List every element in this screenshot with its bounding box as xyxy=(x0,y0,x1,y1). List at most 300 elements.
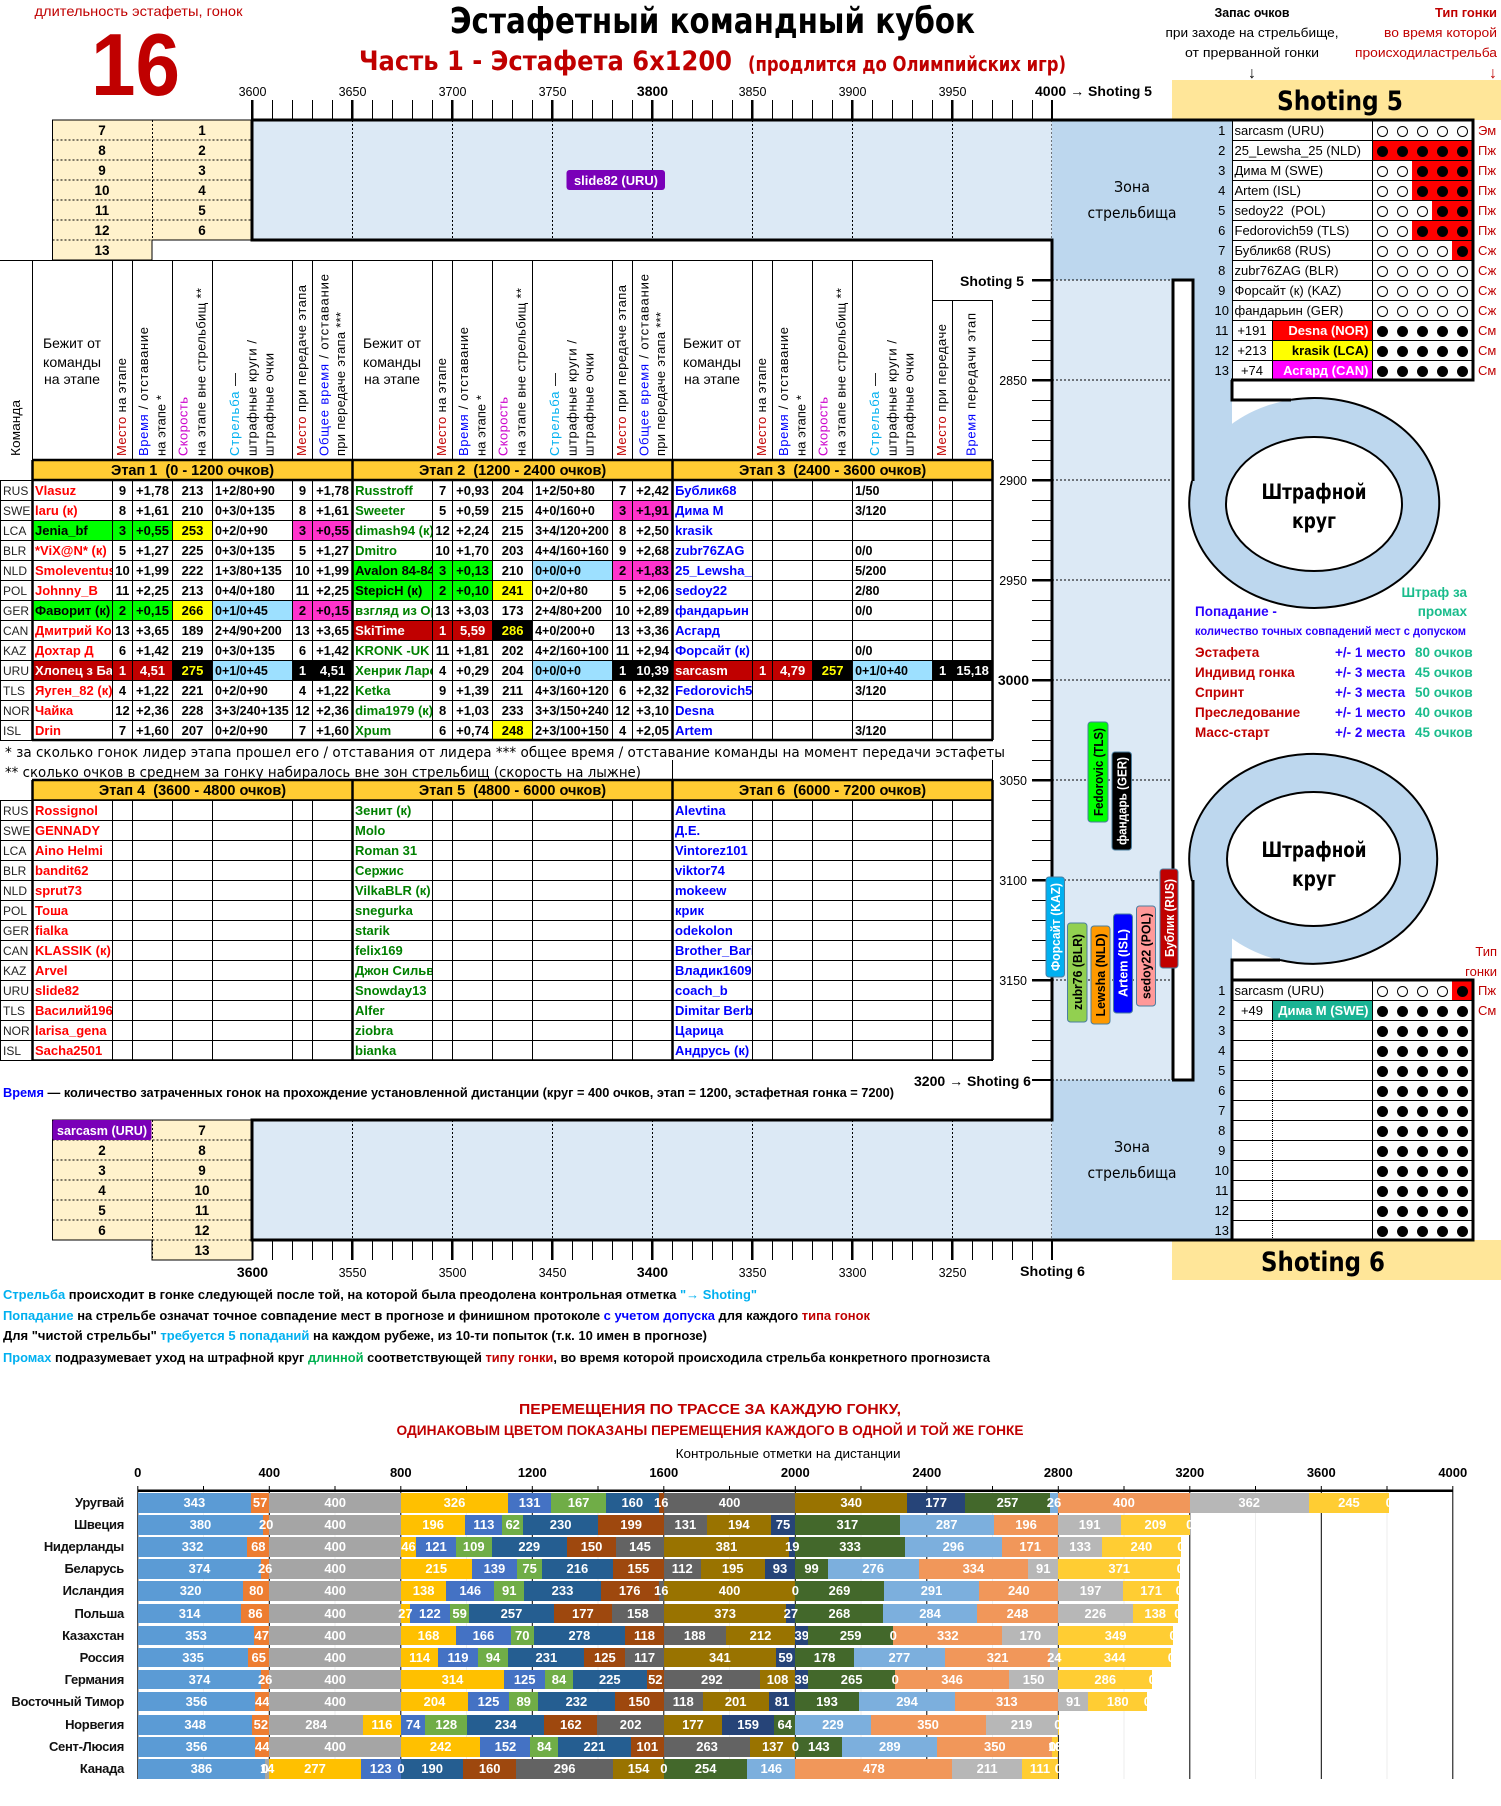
chart row: Канада: 296 xyxy=(554,1761,575,1776)
table header columns: Стрельба — xyxy=(547,373,562,456)
chart row: Германия xyxy=(65,1670,1156,1689)
chart row: Нидерланды: 145 xyxy=(629,1539,651,1554)
table: stages 1-3: 1 xyxy=(439,622,446,638)
table: stages 1-3: 1 xyxy=(299,662,306,678)
table: stages 1-3: +3,03 xyxy=(456,602,489,618)
chart row: Исландия: 176 xyxy=(619,1583,641,1598)
table: stages 4-6: Этап 5 (4800 - 6000 очков) xyxy=(419,782,606,798)
table header columns: на этапе xyxy=(364,371,420,387)
table: Shoting 5 standings: Пж xyxy=(1478,223,1496,238)
table: stages 1-3: Avalon 84-84 xyxy=(355,562,433,578)
chart row: Канада: 146 xyxy=(760,1761,782,1776)
chart row: Казахстан: 170 xyxy=(1019,1628,1041,1643)
table: stages 1-3: +1,22 xyxy=(136,682,169,698)
table: stages 4-6: odekolon xyxy=(675,922,733,938)
table: stages 4-6: KLASSIK (к) xyxy=(35,942,111,958)
table: stages 1-3: 0+0/0+0 xyxy=(535,564,581,578)
chart row: Норвегия: 159 xyxy=(737,1717,759,1732)
table: Shoting 5 standings: 7 xyxy=(1218,243,1225,258)
table: stages 1-3: 4 xyxy=(119,682,126,698)
chart row: Россия: 178 xyxy=(814,1650,835,1665)
chart row: Уругвай: 400 xyxy=(719,1495,740,1510)
table: Shoting 5 standings: Fedorovich59 (TLS) xyxy=(1234,223,1349,238)
chart row: Восточный Тимор: 400 xyxy=(324,1694,346,1709)
table: Shoting 5 standings: 8 xyxy=(1218,263,1225,278)
table: Shoting 6 standings: 1 xyxy=(1218,983,1225,998)
chart row: Уругвай: 177 xyxy=(925,1495,947,1510)
chart row: Казахстан: 259 xyxy=(840,1628,862,1643)
chart row: Россия: 94 xyxy=(486,1650,500,1665)
panel: start grid bottom: 7 xyxy=(198,1123,206,1138)
table: stages 1-3: 225 xyxy=(182,542,203,558)
table: stages 1-3: +1,70 xyxy=(456,542,489,558)
table header columns: штрафные круги / xyxy=(244,340,260,456)
table: Shoting 5 standings: Сж xyxy=(1478,303,1496,318)
chart row: Уругвай: 167 xyxy=(568,1495,589,1510)
text: Швеция xyxy=(74,1517,124,1532)
table: stages 1-3: Ketka xyxy=(355,682,391,698)
table header columns: Команда xyxy=(8,399,23,456)
table: stages 1-3: 204 xyxy=(502,662,523,678)
chart row: Швеция: 191 xyxy=(1079,1517,1100,1532)
table: stages 1-3: Бублик68 xyxy=(675,482,736,498)
table: stages 1-3: 275 xyxy=(182,662,203,678)
chart row: Нидерланды: 109 xyxy=(463,1539,485,1554)
chart row: Сент-Люсия: 84 xyxy=(537,1739,551,1754)
note: points reserve: от прерванной гонки xyxy=(1185,45,1319,60)
table: stages 1-3: 2 xyxy=(439,582,446,598)
table: stages 1-3: 210 xyxy=(502,562,523,578)
chart row: Россия: 400 xyxy=(324,1650,346,1665)
relay duration value: 16 xyxy=(91,15,180,114)
chart row: Беларусь xyxy=(64,1559,1184,1579)
chart row: Беларусь: 93 xyxy=(773,1561,787,1576)
chart row: Германия: 374 xyxy=(189,1672,210,1687)
panel: shooting zones and penalty loops xyxy=(1052,120,1439,1240)
chart row: Швеция: 75 xyxy=(776,1517,790,1532)
chart row: Швеция: 400 xyxy=(324,1517,346,1532)
chart row: Канада: 0 xyxy=(261,1761,268,1776)
chart row: Сент-Люсия: 356 xyxy=(186,1739,207,1754)
chart row: Швеция: 317 xyxy=(837,1517,858,1532)
text: Исландия xyxy=(63,1583,124,1598)
table: stages 1-3: +1,27 xyxy=(316,542,349,558)
table: Shoting 6 standings: 5 xyxy=(1218,1063,1225,1078)
table: stages 1-3: +1,91 xyxy=(636,502,669,518)
chart row: Швеция: 196 xyxy=(422,1517,444,1532)
table: Shoting 6 standings: 10 xyxy=(1215,1163,1229,1178)
note: race type near bottom table: Тип xyxy=(1475,944,1497,959)
table: stages 1-3: +0,55 xyxy=(316,522,349,538)
table: stages 1-3: BLR xyxy=(3,544,26,558)
table: stages 1-3: 215 xyxy=(502,502,523,518)
text: penalty loop 2 label xyxy=(1262,838,1366,891)
footnotes xyxy=(5,745,1005,781)
table: Shoting 5 standings: Пж xyxy=(1478,203,1496,218)
chart row: Россия: 341 xyxy=(709,1650,731,1665)
legend: hits and penalties: +/- 3 места xyxy=(1335,685,1406,700)
chart row: Швеция: 62 xyxy=(505,1517,520,1532)
table: stages 1-3: 2+4/80+200 xyxy=(535,604,602,618)
text: zone label top xyxy=(1088,178,1176,222)
table: stages 1-3: 213 xyxy=(182,482,203,498)
table: stages 1-3: 203 xyxy=(502,542,523,558)
table: stages 1-3: 6 xyxy=(119,642,126,658)
table: Shoting 5 standings: Эм xyxy=(1478,123,1496,138)
text: 0 xyxy=(1386,1495,1393,1510)
chart row: Канада: 0 xyxy=(397,1761,405,1776)
chart row: Беларусь: 215 xyxy=(425,1561,447,1576)
pill: sedoy22: sedoy22 (POL) xyxy=(1138,913,1154,999)
note: points reserve: ↓ xyxy=(1248,65,1256,82)
legend: hits and penalties: Спринт xyxy=(1195,685,1245,700)
table: stages 4-6: Этап 6 (6000 - 7200 очков) xyxy=(739,782,926,798)
chart row: Польша: 284 xyxy=(919,1606,941,1621)
table: stages 1-3: 9 xyxy=(619,542,626,558)
table header columns: штрафные очки xyxy=(582,353,596,456)
table: stages 1-3: 222 xyxy=(182,562,203,578)
table: Shoting 6 standings: sarcasm (URU) xyxy=(1234,983,1324,998)
table: stages 4-6: BLR xyxy=(3,864,26,878)
chart row: Казахстан: 70 xyxy=(515,1628,529,1643)
pill: Artem: Artem (ISL) xyxy=(1116,929,1130,997)
panel: start grid top: 9 xyxy=(98,163,106,178)
panel: start grid bottom: 11 xyxy=(195,1203,210,1218)
table: stages 1-3: 204 xyxy=(502,482,523,498)
chart row: Норвегия: 177 xyxy=(682,1717,704,1732)
chart row: Польша: 400 xyxy=(324,1606,346,1621)
chart row: Россия: 65 xyxy=(252,1650,266,1665)
table: stages 1-3: 6 xyxy=(299,642,306,658)
table: stages 1-3: 3+3/150+240 xyxy=(535,704,609,718)
chart row: Польша: 257 xyxy=(501,1606,522,1621)
table: Shoting 6 standings: 11 xyxy=(1215,1183,1228,1198)
chart row: Исландия: 91 xyxy=(502,1583,516,1598)
table header columns: на этапе * xyxy=(794,395,808,456)
chart row: Нидерланды: 133 xyxy=(1069,1539,1091,1554)
table header columns: Место на этапе xyxy=(434,358,449,456)
ruler: bottom distance scale: 3600 xyxy=(237,1264,268,1280)
table: stages 1-3: 1 xyxy=(759,662,766,678)
table: stages 4-6: bandit62 xyxy=(35,862,88,878)
table: stages 1-3: Яуген_82 (к) xyxy=(35,682,112,698)
chart row: Восточный Тимор: 150 xyxy=(628,1694,650,1709)
table: stages 1-3: +2,24 xyxy=(456,522,489,538)
table: Shoting 5 standings: Пж xyxy=(1478,183,1496,198)
table: stages 1-3: *ViX@N* (к) xyxy=(35,542,107,558)
chart row: Германия: 125 xyxy=(514,1672,536,1687)
table: Shoting 6 standings: 2 xyxy=(1218,1003,1225,1018)
table: Shoting 6 standings: См xyxy=(1478,1003,1496,1018)
panel: start grid bottom: 6 xyxy=(98,1223,106,1238)
table: stages 1-3: 4,79 xyxy=(780,662,805,678)
text: zone label top: Зона xyxy=(1114,178,1150,196)
table header columns: при передаче этапа *** xyxy=(653,312,668,456)
chart row: Беларусь: 99 xyxy=(804,1561,819,1576)
ruler: vertical distance scale: 3150 xyxy=(999,974,1027,988)
chart row: Восточный Тимор: 356 xyxy=(186,1694,207,1709)
chart axis: 3600 xyxy=(1307,1465,1336,1480)
legend: hits and penalties: 50 очков xyxy=(1415,685,1473,700)
chart row: Германия: 265 xyxy=(841,1672,862,1687)
table: stages 1-3: CAN xyxy=(3,624,28,638)
chart row: Сент-Люсия: 143 xyxy=(808,1739,830,1754)
panel: start grid bottom: 2 xyxy=(98,1143,106,1158)
chart row: Канада xyxy=(80,1759,1062,1779)
table header columns: команды xyxy=(363,354,421,370)
table: stages 1-3: 248 xyxy=(502,722,523,738)
table: Shoting 5 standings: 1 xyxy=(1218,123,1225,138)
table: stages 1-3: +1,39 xyxy=(456,682,489,698)
table: stages 1-3: +0,15 xyxy=(136,602,169,618)
table: stages 1-3: +2,05 xyxy=(636,722,669,738)
legend: hits and penalties: +/- 1 место xyxy=(1335,645,1406,660)
text: penalty loop 1 label xyxy=(1262,480,1366,533)
table: Shoting 5 standings: Artem (ISL) xyxy=(1234,183,1301,198)
table: stages 1-3: LCA xyxy=(3,524,26,538)
chart axis: 800 xyxy=(390,1465,412,1480)
table: stages 4-6: Molo xyxy=(355,822,385,838)
table: Shoting 5 standings: 9 xyxy=(1218,283,1225,298)
chart row: Исландия: 146 xyxy=(459,1583,481,1598)
text: zone label bottom xyxy=(1088,1138,1176,1182)
chart row: Уругвай xyxy=(75,1493,1393,1513)
text: Россия xyxy=(80,1650,124,1665)
chart row: Казахстан: 349 xyxy=(1105,1628,1126,1643)
table header columns: Общее время / отставание xyxy=(316,274,332,456)
table: Shoting 5 standings: Сж xyxy=(1478,283,1496,298)
chart row: Сент-Люсия: 137 xyxy=(762,1739,784,1754)
table header columns: на этапе * xyxy=(154,395,168,456)
table: Shoting 6 standings xyxy=(1215,982,1496,1238)
table: stages 1-3: POL xyxy=(3,584,27,598)
note: race type: Тип гонки xyxy=(1435,5,1497,20)
table: stages 1-3: +1,60 xyxy=(316,722,349,738)
table: stages 1-3: 1/50 xyxy=(855,484,879,498)
text: penalty loop 2 label: Штрафной xyxy=(1262,838,1366,862)
table: stages 1-3: +3,65 xyxy=(136,622,169,638)
chart row: Германия: 346 xyxy=(941,1672,963,1687)
text: Беларусь xyxy=(64,1561,124,1576)
chart row: Исландия: 240 xyxy=(1008,1583,1030,1598)
table header columns: на этапе вне стрельбищ ** xyxy=(834,288,848,456)
table: stages 1-3: 5/200 xyxy=(855,564,886,578)
chart row: Нидерланды: 68 xyxy=(251,1539,266,1554)
table: stages 1-3: 12 xyxy=(295,702,310,718)
chart row: Беларусь: 371 xyxy=(1108,1561,1130,1576)
legend: hits and penalties: +/- 2 места xyxy=(1335,725,1406,740)
table: stages 4-6: Андрусь (к) xyxy=(675,1042,749,1058)
table: stages 1-3: +1,60 xyxy=(136,722,169,738)
chart row: Восточный Тимор: 201 xyxy=(725,1694,747,1709)
chart row: Польша: 226 xyxy=(1085,1606,1106,1621)
chart row: Восточный Тимор xyxy=(11,1692,1151,1711)
panel: start grid top: 1 xyxy=(198,123,206,138)
table: stages 1-3: StepicH (к) xyxy=(355,582,422,598)
chart row: Швеция: 194 xyxy=(728,1517,750,1532)
table: stages 1-3: +3,10 xyxy=(636,702,669,718)
table: Shoting 6 standings: 3 xyxy=(1218,1023,1225,1038)
chart row: Казахстан: 353 xyxy=(185,1628,207,1643)
table header columns: Стрельба — xyxy=(227,373,242,456)
legend: hits and penalties: +/- 1 место xyxy=(1335,705,1406,720)
panel: start grid bottom: 4 xyxy=(98,1183,106,1198)
text: penalty loop 2 label: круг xyxy=(1292,867,1336,891)
chart row: Сент-Люсия: 242 xyxy=(430,1739,452,1754)
chart row: Восточный Тимор: 81 xyxy=(775,1694,789,1709)
table header columns: команды xyxy=(683,354,741,370)
table: stages 1-3: sarcasm xyxy=(675,662,728,678)
chart row: Исландия: 80 xyxy=(249,1583,264,1598)
table: stages 4-6: fialka xyxy=(35,922,68,938)
table: stages 1-3: +1,81 xyxy=(456,642,489,658)
pill: zubr76: zubr76 (BLR) xyxy=(1070,934,1085,1010)
chart row: Норвегия: 348 xyxy=(184,1717,206,1732)
chart row: Россия: 114 xyxy=(409,1650,430,1665)
table: Shoting 5 standings: Асгард (CAN) xyxy=(1283,363,1368,378)
table: stages 4-6: Этап 4 (3600 - 4800 очков) xyxy=(99,782,286,798)
chart row: Германия: 52 xyxy=(648,1672,663,1687)
note: race type xyxy=(1355,5,1498,82)
chart row: Швеция: 209 xyxy=(1145,1517,1166,1532)
table header columns: штрафные круги / xyxy=(564,340,580,456)
legend: hits and penalties: Преследование xyxy=(1195,705,1301,720)
chart row: Казахстан: 332 xyxy=(937,1628,959,1643)
table: Shoting 5 standings: Пж xyxy=(1478,163,1496,178)
table: stages 4-6: Alevtina xyxy=(675,802,726,818)
table: stages 1-3: +0,10 xyxy=(456,582,489,598)
ruler: top distance scale: 3950 xyxy=(939,85,966,99)
chart row: Беларусь: 195 xyxy=(722,1561,744,1576)
table: stages 4-6: snegurka xyxy=(355,902,413,918)
table: stages 1-3: krasik xyxy=(675,522,713,538)
table: stages 1-3: 1+2/50+80 xyxy=(535,484,595,498)
panel: start grid bottom xyxy=(52,1120,252,1260)
table: stages 1-3: TLS xyxy=(3,684,25,698)
table: Shoting 5 standings: 3 xyxy=(1218,163,1225,178)
table: stages 1-3: Vlasuz xyxy=(35,482,76,498)
chart title: ОДИНАКОВЫМ ЦВЕТОМ ПОКАЗАНЫ ПЕРЕМЕЩЕНИЯ КАЖДОГО В ОДНОЙ И ТОЙ ЖЕ ГОНКЕ xyxy=(396,1421,1024,1438)
chart row: Уругвай: 257 xyxy=(997,1495,1018,1510)
rules text xyxy=(3,1287,991,1365)
chart row: Казахстан: 212 xyxy=(750,1628,771,1643)
legend: hits and penalties: Масс-старт xyxy=(1195,725,1270,740)
chart row: Уругвай: 245 xyxy=(1338,1495,1360,1510)
table: stages 4-6: Roman 31 xyxy=(355,842,417,858)
table: stages 1-3: Jenia_bf xyxy=(35,522,88,538)
table: Shoting 5 standings: sedoy22 (POL) xyxy=(1234,203,1326,218)
table: stages 4-6: POL xyxy=(3,904,27,918)
legend: hits and penalties: Эстафета xyxy=(1195,645,1260,660)
chart row: Восточный Тимор: 313 xyxy=(996,1694,1018,1709)
table header columns xyxy=(0,260,992,460)
chart row: Россия: 344 xyxy=(1104,1650,1126,1665)
table: stages 1-3: 2 xyxy=(119,602,126,618)
table: stages 1-3: 9 xyxy=(119,482,126,498)
table: Shoting 5 standings: 6 xyxy=(1218,223,1225,238)
table: stages 4-6: Alfer xyxy=(355,1002,385,1018)
chart row: Уругвай: 343 xyxy=(184,1495,205,1510)
table: stages 4-6: SWE xyxy=(3,824,30,838)
chart row: Сент-Люсия: 289 xyxy=(879,1739,901,1754)
legend: hits and penalties: 80 очков xyxy=(1415,645,1473,660)
pill: Lewsha xyxy=(1091,926,1110,1024)
table: stages 1-3: +0,93 xyxy=(456,482,489,498)
chart row: Исландия xyxy=(63,1581,1183,1601)
chart row: Казахстан: 118 xyxy=(634,1628,655,1643)
heading: Shoting 6 xyxy=(1172,1240,1501,1280)
chart row: Швеция xyxy=(74,1515,1193,1535)
table: stages 1-3: 5 xyxy=(439,502,446,518)
table: Shoting 6 standings: 9 xyxy=(1218,1143,1225,1158)
table: Shoting 6 standings: Пж xyxy=(1478,983,1496,998)
table: stages 1-3: 0+1/0+45 xyxy=(215,604,268,618)
chart row: Казахстан: 47 xyxy=(254,1628,269,1643)
table: Shoting 6 standings: 6 xyxy=(1218,1083,1225,1098)
table: stages 1-3: +2,94 xyxy=(636,642,669,658)
ruler: top distance scale: 3700 xyxy=(439,85,466,99)
table: stages 4-6: Джон Сильв xyxy=(355,962,432,978)
chart row: Исландия: 320 xyxy=(180,1583,201,1598)
table: stages 4-6: Sacha2501 xyxy=(35,1042,102,1058)
chart row: Казахстан: 400 xyxy=(324,1628,346,1643)
table: stages 1-3: 4 xyxy=(619,722,626,738)
chart row: Канада: 254 xyxy=(695,1761,716,1776)
table: stages 1-3: 5,59 xyxy=(460,622,485,638)
table: stages 1-3: 207 xyxy=(182,722,203,738)
table: stages 1-3: 189 xyxy=(182,622,203,638)
chart row: Швеция: 380 xyxy=(190,1517,211,1532)
chart row: Норвегия: 64 xyxy=(778,1717,792,1732)
chart row: Сент-Люсия: 400 xyxy=(324,1739,346,1754)
heading: Shoting 6: Shoting 6 xyxy=(1261,1247,1385,1278)
text: 0 xyxy=(1177,1561,1184,1576)
table: stages 1-3: 7 xyxy=(119,722,126,738)
table: Shoting 6 standings: 13 xyxy=(1215,1223,1229,1238)
table: Shoting 6 standings: 4 xyxy=(1218,1043,1225,1058)
table: stages 1-3: 0+2/0+80 xyxy=(535,584,588,598)
table: stages 1-3: фандарьин xyxy=(675,602,749,618)
table: stages 4-6: Rossignol xyxy=(35,802,98,818)
chart axis: 2000 xyxy=(781,1465,810,1480)
table: Shoting 5 standings xyxy=(1215,122,1496,378)
table: stages 1-3: 211 xyxy=(502,682,523,698)
chart axis: 2400 xyxy=(912,1465,941,1480)
panel: start grid top: 3 xyxy=(198,163,206,178)
table: stages 1-3: +1,83 xyxy=(636,562,669,578)
table: stages 1-3: 13 xyxy=(435,602,450,618)
text: Норвегия xyxy=(65,1717,124,1732)
table: stages 1-3: 173 xyxy=(502,602,523,618)
table: stages 4-6: крик xyxy=(675,902,704,918)
table: Shoting 5 standings: zubr76ZAG (BLR) xyxy=(1234,263,1339,278)
table header columns: на этапе * xyxy=(474,395,488,456)
rules text: Попадание на стрельбе означат точное совпадение мест в прогнозе и финишном протоколе с учетом допуска для каждого типа гонок xyxy=(3,1308,870,1323)
chart row: Норвегия: 219 xyxy=(1011,1717,1032,1732)
time definition note: Время — количество затраченных гонок на прохождение установленной дистанции (круг = 400 очков, этап = 1200, эстафетная гонка = 7200) xyxy=(3,1085,894,1100)
ruler: top distance scale xyxy=(239,83,1152,110)
table: stages 1-3: 15,18 xyxy=(956,662,989,678)
table: stages 4-6: Василий196 xyxy=(35,1002,112,1018)
ruler: bottom distance scale: 3250 xyxy=(939,1266,966,1280)
table: stages 1-3: dimash94 (к) xyxy=(355,522,433,538)
footnotes: * за сколько гонок лидер этапа прошел его / отставания от лидера *** общее время / отставание команды на момент передачи эстафеты xyxy=(5,745,1005,761)
pill: zubr76 xyxy=(1068,923,1087,1022)
table: stages 1-3: 8 xyxy=(619,522,626,538)
table: stages 1-3: 12 xyxy=(435,522,450,538)
table: stages 1-3: +0,74 xyxy=(456,722,489,738)
note: race type: ↓ xyxy=(1489,65,1497,82)
